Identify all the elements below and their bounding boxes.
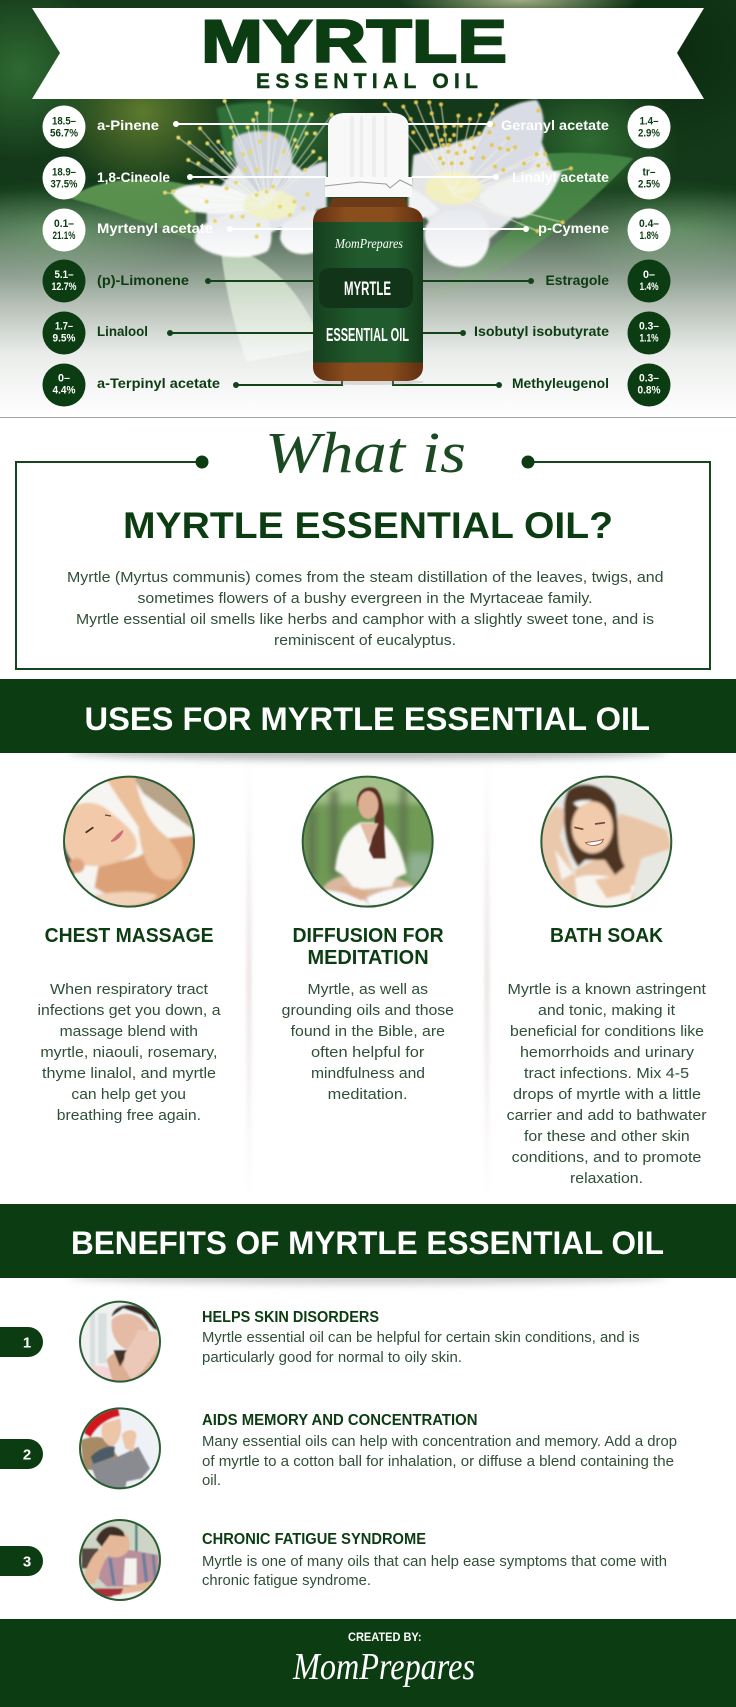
title and description: particularly good for normal to oily skin. bbox=[202, 1349, 462, 1366]
icon: essential oil bottle bbox=[312, 113, 424, 385]
leaf: right leaf bbox=[470, 152, 634, 270]
percentage badges right: 1.4% bbox=[640, 281, 659, 293]
bottle label: MYRTLE: MYRTLE bbox=[344, 279, 391, 300]
number tab 2: 2 bbox=[23, 1446, 31, 1464]
body text: breathing free again. bbox=[57, 1107, 201, 1124]
right compound labels: p-Cymene bbox=[538, 220, 609, 236]
subtitle: ESSENTIAL OIL: ESSENTIAL OIL bbox=[256, 70, 478, 93]
percentage badges right bbox=[628, 106, 670, 406]
number tab 1: 1 bbox=[23, 1334, 31, 1352]
percentage badges left: 18.9– bbox=[52, 166, 76, 178]
bottle label: dark plate bbox=[319, 268, 413, 308]
percentage badges left: 0.1– bbox=[54, 218, 74, 230]
number tab 1 bbox=[0, 1327, 43, 1357]
body text: for these and other skin bbox=[524, 1128, 690, 1145]
left compound labels: a-Terpinyl acetate bbox=[97, 375, 220, 391]
description text: sometimes flowers of a bushy evergreen in the Myrtaceae family. bbox=[138, 590, 592, 607]
body text: infections get you down, a bbox=[38, 1002, 221, 1019]
heading: bath soak: BATH SOAK bbox=[550, 925, 664, 947]
heading bar: benefits: BENEFITS OF MYRTLE ESSENTIAL OIL bbox=[71, 1225, 664, 1261]
description text: reminiscent of eucalyptus. bbox=[274, 632, 456, 649]
body text: relaxation. bbox=[570, 1170, 643, 1187]
title and description: of myrtle to a cotton ball for inhalation, or diffuse a blend containing the bbox=[202, 1453, 674, 1470]
percentage badges right: 0.3– bbox=[639, 372, 659, 384]
percentage badges right: 0.3– bbox=[639, 320, 659, 332]
percentage badges left: 18.5– bbox=[52, 116, 76, 128]
body text: conditions, and to promote bbox=[512, 1149, 701, 1166]
bottle cap bbox=[325, 113, 412, 197]
benefit 2: aids memory and concentration bbox=[0, 1407, 677, 1490]
heading bar: uses: USES FOR MYRTLE ESSENTIAL OIL bbox=[84, 701, 650, 737]
photo: tired student bbox=[80, 1520, 160, 1602]
percentage badges right: 2.5% bbox=[638, 178, 660, 190]
percentage badges right: 1.4– bbox=[640, 116, 658, 128]
right compound labels: Methyleugenol bbox=[512, 375, 609, 391]
photo: skin care bbox=[80, 1302, 160, 1383]
percentage badges right: 0.8% bbox=[638, 384, 661, 396]
description text: Myrtle (Myrtus communis) comes from the steam distillation of the leaves, twigs, and bbox=[67, 569, 664, 586]
photo: bath bbox=[540, 775, 673, 910]
leader lines bbox=[167, 121, 534, 388]
percentage badges right: 1.1% bbox=[640, 332, 659, 344]
percentage badges left: 56.7% bbox=[50, 128, 78, 140]
created by label: CREATED BY: bbox=[348, 1630, 422, 1644]
heading: diffusion for meditation bbox=[292, 925, 444, 969]
heading bar: uses bbox=[0, 679, 736, 753]
heading bar: benefits bbox=[0, 1204, 736, 1278]
left compound labels: (p)-Limonene bbox=[97, 272, 189, 288]
title and description: CHRONIC FATIGUE SYNDROME bbox=[202, 1531, 426, 1548]
heading: chest massage: CHEST MASSAGE bbox=[45, 925, 214, 947]
body text: carrier and add to bathwater bbox=[507, 1107, 707, 1124]
right compound labels: Estragole bbox=[546, 272, 609, 288]
left compound labels: a-Pinene bbox=[97, 117, 159, 133]
heading script: What is: What is bbox=[265, 420, 466, 485]
title and description: Many essential oils can help with concentration and memory. Add a drop bbox=[202, 1433, 677, 1450]
percentage badges left: 21.1% bbox=[52, 230, 76, 242]
leaf: dark upper leaf bbox=[217, 103, 313, 162]
body text: often helpful for bbox=[311, 1044, 424, 1061]
right compound labels bbox=[474, 117, 609, 391]
benefit 3: chronic fatigue syndrome bbox=[0, 1520, 667, 1602]
title and description: HELPS SKIN DISORDERS bbox=[202, 1309, 379, 1326]
shadow under benefits bar bbox=[68, 1270, 668, 1284]
body text bbox=[507, 981, 707, 1187]
panel: what is myrtle essential oil bbox=[16, 420, 710, 669]
title and description: oil. bbox=[202, 1472, 221, 1489]
photo: meditation bbox=[302, 776, 434, 908]
number tab 3: 3 bbox=[23, 1554, 31, 1570]
right compound labels: Isobutyl isobutyrate bbox=[474, 323, 609, 339]
left compound labels: Myrtenyl acetate bbox=[97, 220, 213, 236]
right compound labels: Geranyl acetate bbox=[501, 117, 609, 133]
footer bbox=[0, 1619, 736, 1707]
percentage badges left: 5.1– bbox=[54, 269, 74, 281]
panel: hero with flowers bbox=[0, 0, 736, 418]
body text: found in the Bible, are bbox=[291, 1023, 445, 1040]
body text: Myrtle, as well as bbox=[308, 981, 428, 998]
body text bbox=[38, 981, 221, 1124]
body text: meditation. bbox=[328, 1086, 408, 1103]
body text: thyme linalol, and myrtle bbox=[42, 1065, 216, 1082]
description text bbox=[67, 569, 664, 649]
panel: bath soak bbox=[507, 775, 707, 1187]
title and description bbox=[202, 1309, 640, 1366]
body text: myrtle, niaouli, rosemary, bbox=[40, 1044, 217, 1061]
right compound labels: Linalyl acetate bbox=[512, 169, 609, 185]
body text: drops of myrtle with a little bbox=[513, 1086, 701, 1103]
body text: When respiratory tract bbox=[50, 981, 209, 998]
percentage badges right: tr– bbox=[642, 166, 656, 178]
title banner bbox=[32, 8, 704, 99]
left compound labels: Linalool bbox=[97, 323, 148, 339]
number tab 2 bbox=[0, 1439, 43, 1469]
panel: diffusion for meditation bbox=[282, 770, 454, 1103]
panel: chest massage bbox=[38, 775, 221, 1124]
percentage badges right: 1.8% bbox=[640, 230, 659, 242]
heading: diffusion for meditation: DIFFUSION FOR bbox=[292, 925, 444, 947]
left flower bbox=[165, 100, 332, 257]
percentage badges left: 37.5% bbox=[50, 178, 78, 190]
shadow under uses bar bbox=[68, 744, 668, 760]
number tab 3 bbox=[0, 1546, 43, 1576]
description text: Myrtle essential oil smells like herbs and camphor with a slightly sweet tone, and is bbox=[76, 611, 654, 628]
percentage badges left: 1.7– bbox=[55, 320, 73, 332]
leaf: left leaf bbox=[70, 179, 200, 242]
leaf: pale lower leaf bbox=[221, 254, 313, 358]
right flower bbox=[385, 100, 571, 267]
percentage badges left bbox=[42, 106, 86, 406]
body text: mindfulness and bbox=[311, 1065, 425, 1082]
body text: grounding oils and those bbox=[282, 1002, 454, 1019]
title and description: chronic fatigue syndrome. bbox=[202, 1572, 371, 1589]
heading: myrtle essential oil: MYRTLE ESSENTIAL OIL? bbox=[123, 505, 613, 546]
photo: sneezing woman bbox=[80, 1407, 160, 1490]
body text: massage blend with bbox=[60, 1023, 198, 1040]
left compound labels bbox=[97, 117, 220, 391]
title and description bbox=[202, 1412, 677, 1489]
percentage badges left: 12.7% bbox=[52, 281, 77, 293]
percentage badges left: 9.5% bbox=[52, 332, 76, 344]
benefit 1: helps skin disorders bbox=[0, 1302, 640, 1383]
percentage badges left: 0– bbox=[58, 372, 70, 384]
percentage badges right: 2.9% bbox=[638, 128, 660, 140]
percentage badges left: 4.4% bbox=[52, 384, 76, 396]
title and description bbox=[202, 1531, 667, 1589]
bottle label: brand: MomPrepares bbox=[334, 237, 403, 252]
body text bbox=[282, 981, 454, 1103]
title and description: Myrtle is one of many oils that can help ease symptoms that come with bbox=[202, 1553, 667, 1570]
left compound labels: 1,8-Cineole bbox=[97, 169, 170, 185]
body text: Myrtle is a known astringent bbox=[508, 981, 707, 998]
heading: diffusion for meditation: MEDITATION bbox=[308, 947, 429, 969]
body text: hemorrhoids and urinary bbox=[520, 1044, 695, 1061]
bottle label: ESSENTIAL OIL: ESSENTIAL OIL bbox=[326, 325, 409, 345]
title and description: Myrtle essential oil can be helpful for certain skin conditions, and is bbox=[202, 1329, 640, 1346]
percentage badges right: 0– bbox=[643, 269, 655, 281]
body text: can help get you bbox=[71, 1086, 186, 1103]
body text: and tonic, making it bbox=[538, 1002, 676, 1019]
title: MYRTLE: MYRTLE bbox=[201, 8, 507, 75]
body text: tract infections. Mix 4-5 bbox=[524, 1065, 689, 1082]
title and description: AIDS MEMORY AND CONCENTRATION bbox=[202, 1412, 478, 1429]
percentage badges right: 0.4– bbox=[639, 218, 659, 230]
brand script: MomPrepares bbox=[292, 1646, 475, 1688]
body text: beneficial for conditions like bbox=[510, 1023, 704, 1040]
photo: massage bbox=[62, 775, 198, 910]
